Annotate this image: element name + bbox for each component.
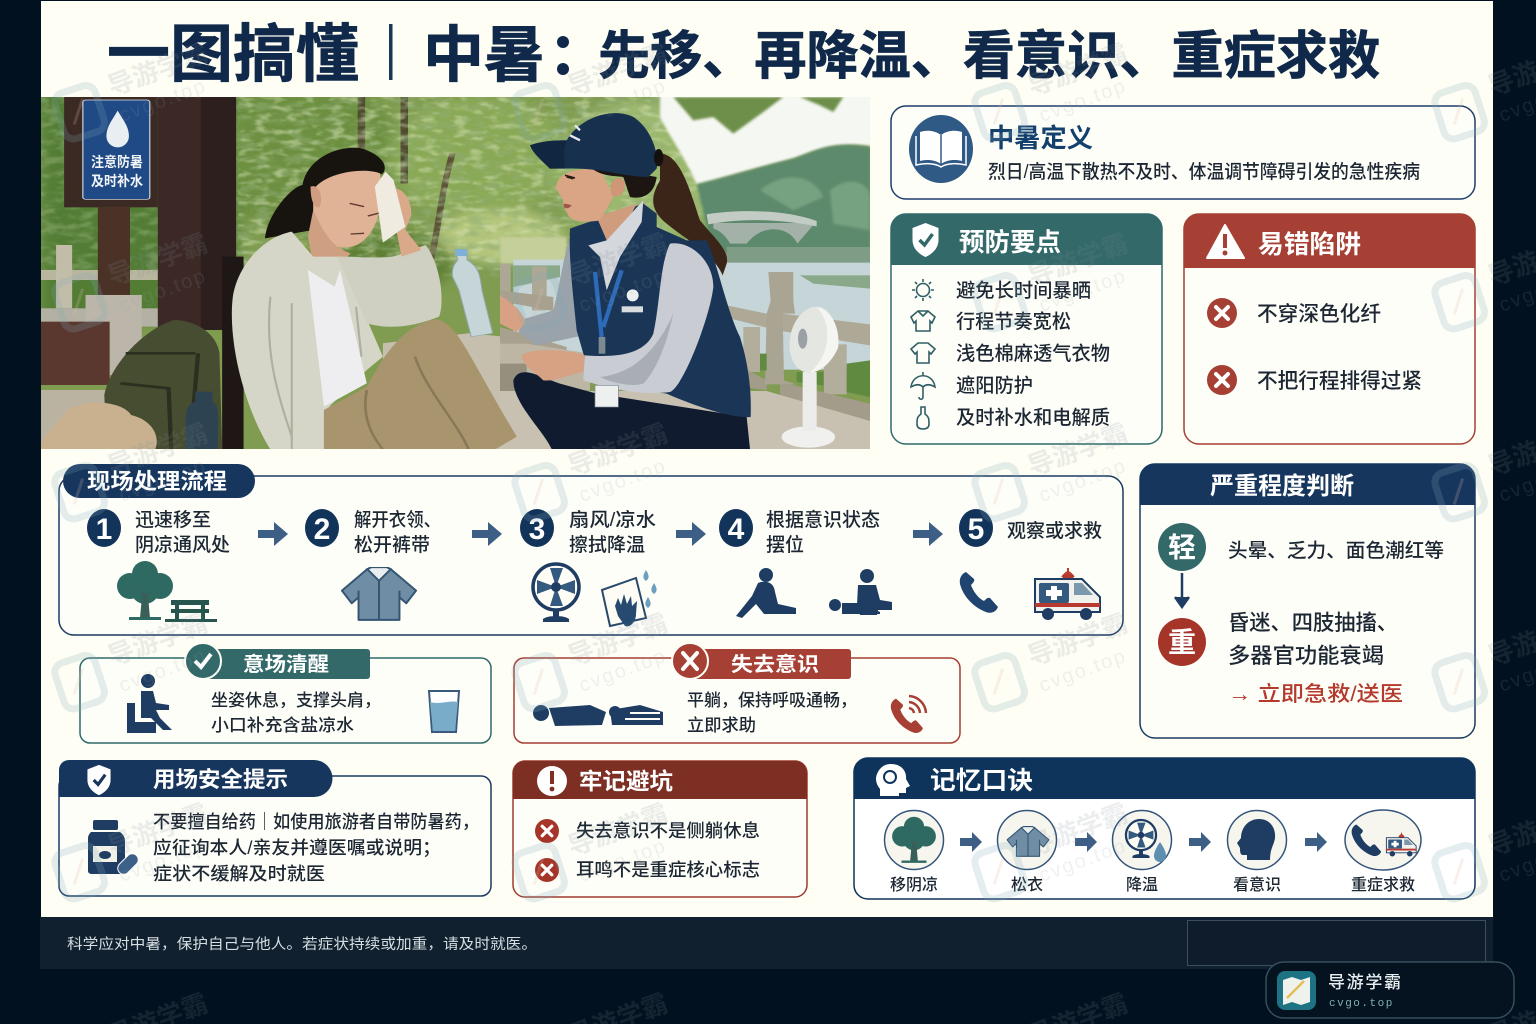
unconscious instructions: 立即求助 xyxy=(687,716,756,735)
icon: CPR figures xyxy=(829,569,892,615)
icon: t-shirt xyxy=(911,343,935,363)
trap item 1: 不穿深色化纤 xyxy=(1257,303,1381,326)
mnemonic 1: move to shade: 移阴凉 xyxy=(890,876,938,894)
icon: sun xyxy=(912,279,934,301)
sitting woman, bag, hat and bottle xyxy=(40,100,517,449)
procedure tag xyxy=(63,464,255,498)
procedure tag: 现场处理流程 xyxy=(87,469,227,494)
panel: conscious xyxy=(80,643,491,743)
icon: shirt xyxy=(342,567,416,620)
arrow xyxy=(258,522,288,546)
step 1: 阴凉通风处 xyxy=(135,534,230,556)
icon: umbrella xyxy=(911,372,935,399)
step 2: 松开裤带 xyxy=(354,534,430,556)
panel: prevention xyxy=(891,214,1162,444)
prevention item 5: 及时补水和电解质 xyxy=(956,407,1110,429)
safety text xyxy=(153,812,479,884)
mnemonic 4: check consciousness xyxy=(1228,810,1286,894)
icon: cross xyxy=(535,819,559,843)
mnemonic heading: 记忆口诀 xyxy=(930,767,1033,795)
arrow xyxy=(472,522,502,546)
panel: definition xyxy=(891,106,1475,199)
severe badge xyxy=(1158,618,1206,666)
icon: loose shirt xyxy=(911,311,935,331)
severe symptoms: 昏迷、四肢抽搐、 xyxy=(1228,611,1398,635)
pitfalls heading: 牢记避坑 xyxy=(579,768,673,794)
unconscious instructions xyxy=(687,691,857,735)
right background: sky, bridge, lake, railing, pavement, fan xyxy=(500,90,877,449)
step 5: 5 xyxy=(968,513,984,546)
straw hat xyxy=(40,403,157,449)
arrow xyxy=(1075,832,1097,852)
step 3: 擦拭降温 xyxy=(569,534,645,556)
panel: on-site procedure xyxy=(59,464,1123,635)
step 3: 扇风/凉水 xyxy=(569,509,656,531)
sign text: 注意防暑 xyxy=(91,154,143,170)
sign text: 及时补水 xyxy=(91,173,143,189)
title: 先移、再降温、看意识、重症求救 xyxy=(598,28,1380,86)
mnemonic 4: check consciousness: 看意识 xyxy=(1233,875,1281,894)
prevention item 2: 行程节奏宽松 xyxy=(956,311,1071,333)
icon: ambulance xyxy=(1035,568,1100,620)
arrow xyxy=(676,522,706,546)
icon: phone xyxy=(960,572,998,613)
footer band xyxy=(40,917,1493,969)
mild badge xyxy=(1158,523,1206,571)
conscious tag: 意场清醒 xyxy=(243,652,329,676)
step 1 xyxy=(87,509,230,556)
icon: shield xyxy=(912,223,938,257)
unconscious tag xyxy=(672,643,851,679)
step 3 xyxy=(520,509,656,556)
mnemonic 3: cool down: 降温 xyxy=(1126,876,1158,894)
icon: person in recovery posture xyxy=(736,568,796,618)
icon: medicine bottle and pills xyxy=(88,820,141,877)
step 4: 根据意识状态 xyxy=(766,509,880,531)
blue warning sign xyxy=(83,100,150,199)
safety text: 应征询本人/亲友并遵医嘱或说明； xyxy=(153,837,441,858)
mild symptoms: 头晕、乏力、面色潮红等 xyxy=(1228,540,1444,562)
icon: cross xyxy=(1207,365,1237,395)
hair xyxy=(265,148,385,238)
water bottle on ground xyxy=(186,392,218,449)
conscious tag xyxy=(185,643,370,679)
seated instructions xyxy=(211,690,381,735)
traps heading: 易错陷阱 xyxy=(1258,231,1361,259)
definition text: 烈日/高温下散热不及时、体温调节障碍引发的急性疾病 xyxy=(988,161,1420,183)
footer band: 科学应对中暑，保护自己与他人。若症状持续或加重，请及时就医。 xyxy=(67,935,537,953)
jacket xyxy=(232,232,442,449)
prevention heading: 预防要点 xyxy=(959,229,1061,257)
brand name: 导游学霸 xyxy=(1328,972,1401,992)
prevention item 1: 避免长时间暴晒 xyxy=(956,280,1091,302)
panel: severity xyxy=(1140,464,1475,738)
severe badge: 重 xyxy=(1168,627,1196,658)
brand badge xyxy=(1266,962,1514,1018)
icon: exclamation xyxy=(537,766,567,796)
title: 中暑 xyxy=(423,21,545,89)
water bottle in hand xyxy=(452,249,493,337)
sign text xyxy=(91,154,143,189)
icon: warning triangle xyxy=(1207,225,1244,258)
left background foliage and pavilion base colors xyxy=(40,77,876,457)
brand url: cvgo.top xyxy=(1329,998,1394,1010)
step 2 xyxy=(305,509,441,556)
icon: head with brain xyxy=(876,764,910,796)
safety tag xyxy=(59,760,332,797)
safety text: 不要擅自给药｜如使用旅游者自带防暑药， xyxy=(153,812,479,832)
title xyxy=(107,20,1380,90)
raised hand and towel xyxy=(375,172,421,257)
icon: shield xyxy=(87,765,111,795)
panel: medication safety xyxy=(59,760,491,896)
panel: common traps xyxy=(1184,214,1475,444)
icon: fan xyxy=(533,564,579,622)
icon: cross xyxy=(1207,298,1237,328)
icon: glass of water xyxy=(429,691,459,732)
step 4 xyxy=(719,509,880,556)
arrow xyxy=(960,832,982,852)
icon: wiping hand with water xyxy=(602,570,657,626)
step 5 xyxy=(959,509,1102,547)
safety text: 症状不缓解及时就医 xyxy=(153,864,325,884)
pitfall 2: 耳鸣不是重症核心标志 xyxy=(576,860,760,880)
severe symptoms: 多器官功能衰竭 xyxy=(1228,644,1384,668)
mnemonic 5: call for help xyxy=(1345,810,1421,894)
step 3: 3 xyxy=(529,513,545,546)
mnemonic 3: cool down xyxy=(1112,810,1172,894)
step 2: 2 xyxy=(314,513,330,546)
step 1: 1 xyxy=(96,513,112,546)
mnemonic 2: loosen clothes xyxy=(998,810,1056,894)
arrow xyxy=(913,522,943,546)
severity heading: 严重程度判断 xyxy=(1210,473,1354,500)
unconscious instructions: 平躺，保持呼吸通畅， xyxy=(687,691,857,710)
arrow down xyxy=(1175,573,1189,607)
step 5: 观察或求救 xyxy=(1007,520,1102,542)
mnemonic 2: loosen clothes: 松衣 xyxy=(1011,876,1043,894)
icon: emergency call xyxy=(891,696,926,733)
unconscious tag: 失去意识 xyxy=(731,652,819,676)
icon: tree and bench xyxy=(117,561,217,622)
prevention item 4: 遮阳防护 xyxy=(956,375,1033,397)
mild badge: 轻 xyxy=(1168,532,1196,563)
mnemonic 5: call for help: 重症求救 xyxy=(1351,876,1415,894)
panel: remember the pitfalls xyxy=(513,761,807,897)
photo: guide helping a heat-struck tourist xyxy=(40,77,877,457)
seated instructions: 小口补充含盐凉水 xyxy=(211,716,354,735)
arrow xyxy=(1305,832,1327,852)
safety heading: 用场安全提示 xyxy=(153,767,288,792)
step 4: 摆位 xyxy=(766,534,804,556)
icon: seated person xyxy=(127,674,172,733)
face xyxy=(308,170,381,257)
panel: mnemonic xyxy=(854,758,1475,899)
step 2: 解开衣领、 xyxy=(354,509,441,531)
icon: cross xyxy=(535,858,559,882)
mnemonic 1: move to shade xyxy=(884,810,944,894)
trap item 2: 不把行程排得过紧 xyxy=(1257,370,1422,393)
icon: bottle xyxy=(917,407,929,429)
definition heading: 中暑定义 xyxy=(988,123,1093,153)
title: 一图搞懂 xyxy=(107,20,359,90)
severe symptoms xyxy=(1228,611,1398,668)
step 1: 迅速移至 xyxy=(135,509,211,531)
icon: map logo xyxy=(1277,971,1316,1010)
step 4: 4 xyxy=(728,513,745,546)
prevention item 3: 浅色棉麻透气衣物 xyxy=(956,343,1110,365)
panel: unconscious xyxy=(514,643,960,743)
guide woman in navy vest and cap xyxy=(500,113,751,449)
seated instructions: 坐姿休息，支撑头肩， xyxy=(211,690,381,710)
backpack xyxy=(104,320,222,449)
emergency action: → 立即急救/送医 xyxy=(1228,683,1403,706)
pitfall 1: 失去意识不是侧躺休息 xyxy=(576,821,760,841)
icon: lying figures xyxy=(533,705,663,726)
arrow xyxy=(1189,832,1211,852)
trousers xyxy=(324,319,517,449)
icon: book xyxy=(909,115,973,183)
